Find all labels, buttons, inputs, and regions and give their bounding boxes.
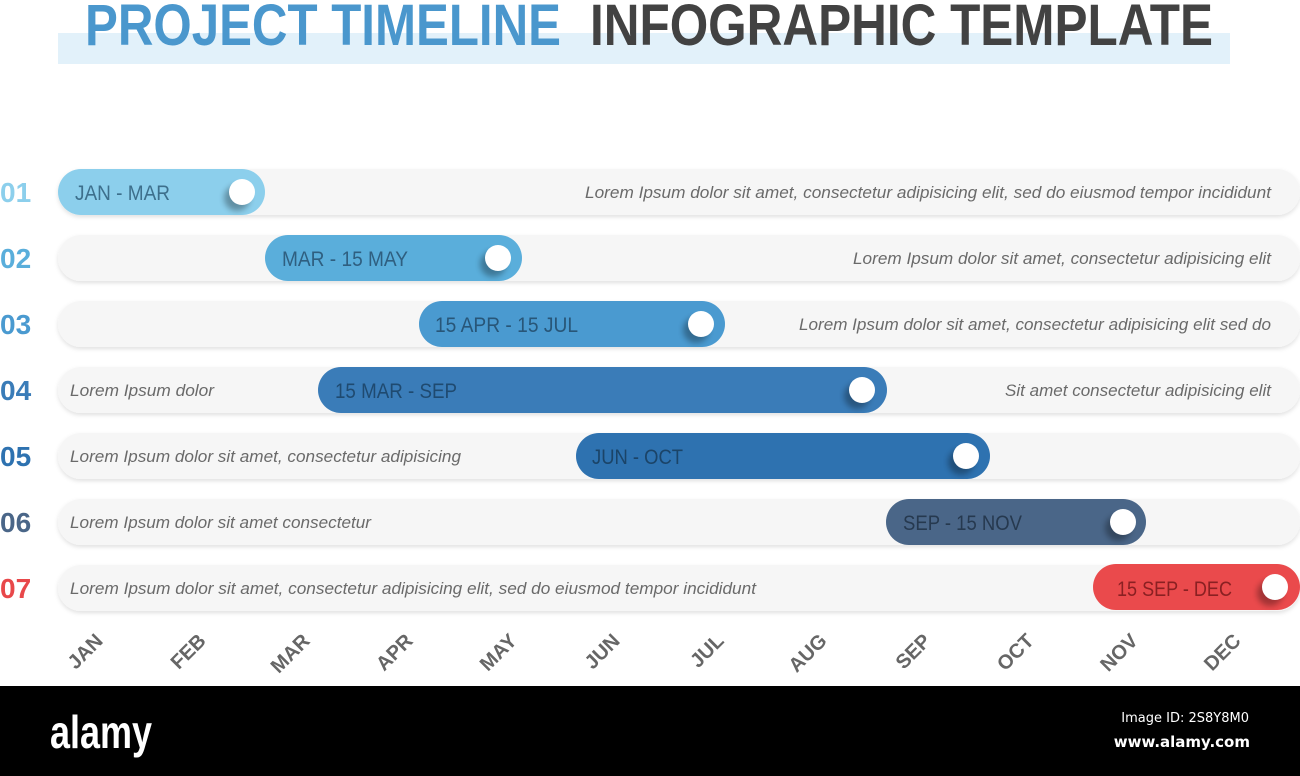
row 07: 15 SEP - DEC [1117,578,1232,601]
footer band: www.alamy.com [1114,733,1250,751]
row 02 [0,235,1300,281]
month axis labels: JUN [581,630,625,674]
row 03: 03 [0,309,31,340]
title [58,0,1230,64]
row 04: Sit amet consectetur adipisicing elit [1005,381,1272,400]
month axis labels: MAY [476,630,522,676]
row 04 [0,367,1300,413]
month axis labels: SEP [892,630,936,674]
row 02: MAR - 15 MAY [282,248,408,271]
row 01: Lorem Ipsum dolor sit amet, consectetur adipisicing elit, sed do eiusmod tempor incididunt [585,183,1272,202]
row 04: 04 [0,375,32,406]
row 06 [0,499,1300,545]
row 01: JAN - MAR [75,182,170,205]
month axis labels [64,630,1246,678]
row 06: 06 [0,507,31,538]
row 04: Lorem Ipsum dolor [70,381,215,400]
month axis labels: FEB [167,630,211,674]
month axis labels: JUL [686,630,729,672]
row 01 [0,169,1300,215]
footer band: alamy [50,706,152,758]
row 03: Lorem Ipsum dolor sit amet, consectetur adipisicing elit sed do [799,315,1271,334]
row 07: 07 [0,573,31,604]
month axis labels: MAR [267,630,315,678]
footer band [0,686,1300,776]
row 05 [0,433,1300,479]
row 06: Lorem Ipsum dolor sit amet consectetur [70,513,372,532]
row 03: 15 APR - 15 JUL [435,314,578,337]
row 06: SEP - 15 NOV [903,512,1022,535]
row 07 [0,564,1300,611]
footer band: Image ID: 2S8Y8M0 [1121,711,1249,726]
month axis labels: AUG [785,630,832,677]
row 02: Lorem Ipsum dolor sit amet, consectetur adipisicing elit [853,249,1272,268]
row 04: 15 MAR - SEP [335,380,457,403]
row 05: Lorem Ipsum dolor sit amet, consectetur adipisicing [70,447,462,466]
row 02: 02 [0,243,31,274]
row 05: JUN - OCT [592,446,683,469]
month axis labels: DEC [1200,630,1246,675]
month axis labels: APR [372,630,418,675]
month axis labels: OCT [993,630,1039,675]
row 05: 05 [0,441,31,472]
row 07: Lorem Ipsum dolor sit amet, consectetur adipisicing elit, sed do eiusmod tempor incididunt [70,579,757,598]
month axis labels: JAN [64,630,108,674]
row 01: 01 [0,177,31,208]
row 03 [0,301,1300,347]
month axis labels: NOV [1096,630,1143,676]
